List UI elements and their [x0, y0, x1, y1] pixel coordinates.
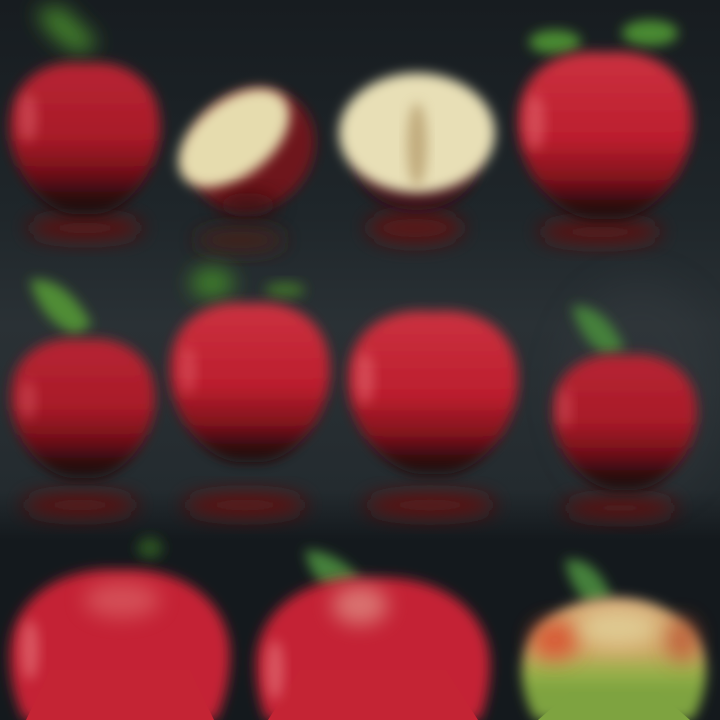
apple 1: [10, 6, 160, 241]
apple 3: cut half: [339, 73, 495, 244]
apple 2: cut half: [160, 63, 340, 252]
apple 10: [256, 550, 490, 720]
apple 9: [10, 537, 230, 720]
apple 7: [348, 311, 518, 518]
row 3 apples: [10, 537, 706, 720]
background glow: [560, 280, 720, 500]
apple 11: red and green: [522, 559, 706, 720]
apple 6: [170, 267, 330, 518]
row 1 apples: [10, 6, 692, 252]
row 2 apples: [11, 267, 697, 520]
apple 8: [553, 306, 697, 520]
apple 4: [518, 20, 692, 245]
apple 5: [11, 280, 155, 518]
